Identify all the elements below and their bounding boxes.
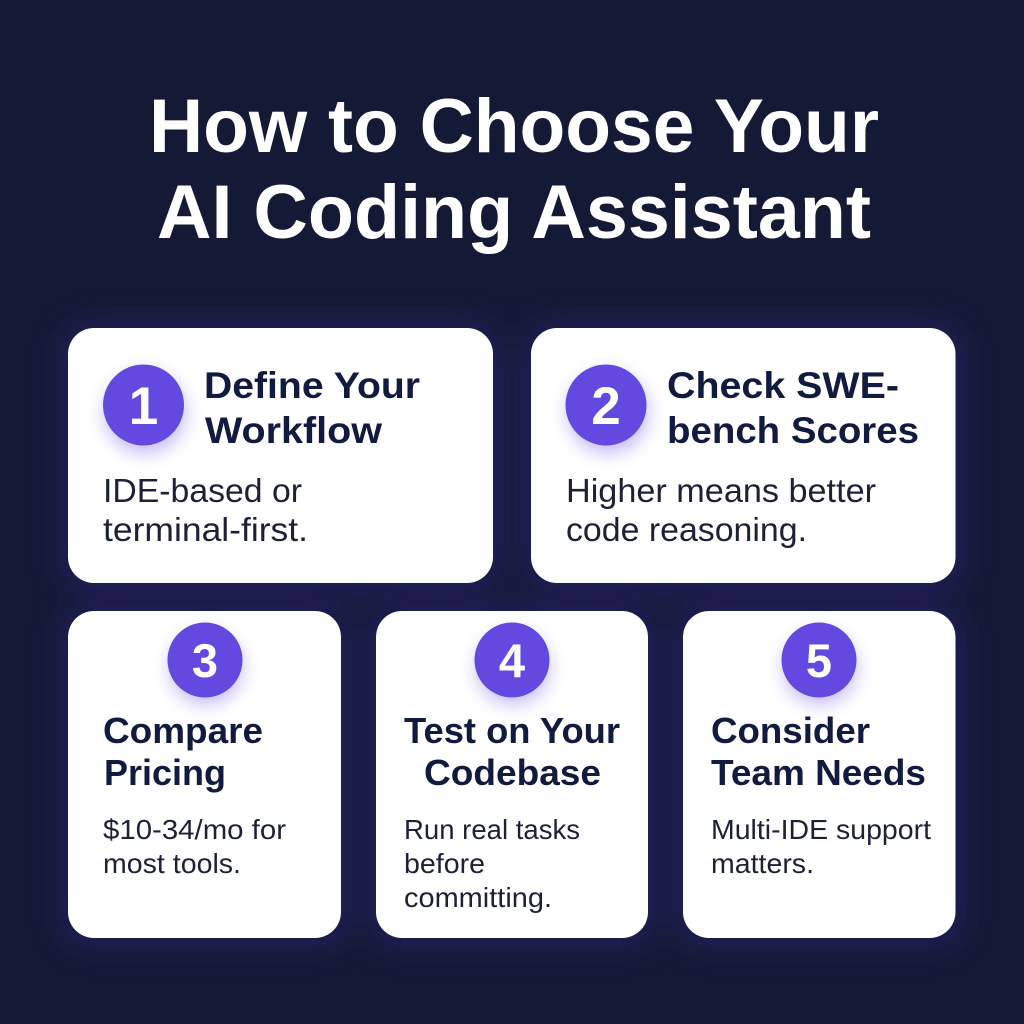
icon: number badge 2: 2 <box>591 377 621 436</box>
heading: test on your codebase: Codebase <box>424 752 601 793</box>
text: step 1 description <box>103 472 308 548</box>
panel: step 3 compare pricing <box>68 611 341 938</box>
heading: compare pricing: Pricing <box>104 752 226 793</box>
icon: number badge 1: 1 <box>129 377 158 436</box>
text: step 2 description: code reasoning. <box>566 511 807 548</box>
text: step 3 description <box>103 814 286 879</box>
title: AI Coding Assistant <box>157 170 871 255</box>
title <box>149 84 879 255</box>
text: step 1 description: IDE-based or <box>103 472 302 509</box>
text: step 2 description <box>566 472 876 548</box>
icon: number badge 3: 3 <box>192 634 218 687</box>
text: step 5 description <box>711 814 931 879</box>
heading: check swe-bench scores <box>667 365 919 451</box>
icon: number badge 1 <box>103 364 185 453</box>
panel: step 2 check swe-bench scores <box>531 328 956 583</box>
icon: number badge 5 <box>782 622 856 704</box>
heading: check swe-bench scores: bench Scores <box>667 410 919 451</box>
heading: compare pricing: Compare <box>103 710 263 751</box>
heading: define your workflow: Workflow <box>205 410 382 451</box>
text: step 5 description: matters. <box>711 848 814 879</box>
text: step 5 description: Multi-IDE support <box>711 814 931 845</box>
text: step 1 description: terminal-first. <box>103 511 308 548</box>
heading: define your workflow: Define Your <box>204 365 420 406</box>
text: step 4 description <box>404 814 580 913</box>
icon: number badge 2 <box>566 364 648 453</box>
heading: test on your codebase <box>404 710 620 793</box>
panel: step 4 test on your codebase <box>376 611 648 938</box>
icon: number badge 4 <box>474 622 550 704</box>
heading: consider team needs <box>711 710 926 793</box>
heading: test on your codebase: Test on Your <box>404 710 620 751</box>
panel: step 1 define your workflow <box>68 328 493 583</box>
heading: check swe-bench scores: Check SWE- <box>667 365 899 406</box>
icon: number badge 3 <box>168 622 242 704</box>
text: step 2 description: Higher means better <box>566 472 876 509</box>
icon: number badge 5: 5 <box>806 634 832 687</box>
heading: consider team needs: Consider <box>711 710 870 751</box>
text: step 3 description: $10-34/mo for <box>103 814 286 845</box>
heading: compare pricing <box>103 710 263 793</box>
text: step 3 description: most tools. <box>103 848 241 879</box>
text: step 4 description: before <box>404 848 485 879</box>
text: step 4 description: Run real tasks <box>404 814 580 845</box>
title: How to Choose Your <box>149 84 879 169</box>
heading: define your workflow <box>204 365 420 451</box>
text: step 4 description: committing. <box>404 882 552 913</box>
heading: consider team needs: Team Needs <box>711 752 926 793</box>
panel: step 5 consider team needs <box>683 611 956 938</box>
icon: number badge 4: 4 <box>499 634 525 687</box>
